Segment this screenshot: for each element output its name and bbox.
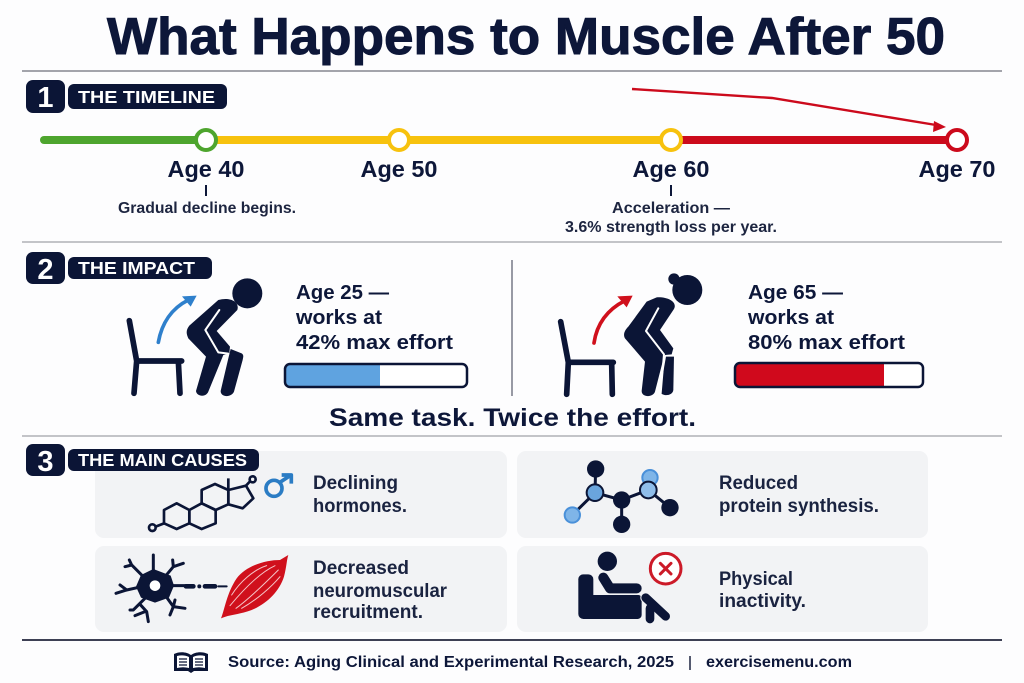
heading: the impact: THE IMPACT xyxy=(78,258,195,278)
text: age 25 effort xyxy=(295,281,453,354)
heading: the impact: 2 xyxy=(37,254,54,286)
note: gradual decline: Gradual decline begins. xyxy=(118,200,296,217)
text: reduced protein synthesis: Reduced xyxy=(719,473,798,494)
icon: protein molecule xyxy=(565,460,679,533)
icon: young man rising from chair xyxy=(129,278,262,396)
text: physical inactivity xyxy=(719,569,806,612)
card: reduced protein synthesis xyxy=(517,451,928,538)
text: age 65 effort: Age 65 — xyxy=(748,281,844,304)
text: age 25 effort: works at xyxy=(295,306,382,329)
text: source citation: Source: Aging Clinical and Experimental Research, 2025 xyxy=(228,654,674,671)
text: decreased neuromuscular recruitment xyxy=(313,558,448,623)
icon: seated person with cross xyxy=(578,552,681,619)
text: declining hormones xyxy=(313,473,407,517)
text: age 25 effort: Age 25 — xyxy=(296,281,389,304)
icon: open book xyxy=(174,652,208,673)
label: age 60: Age 60 xyxy=(632,156,710,182)
panel: section 2 the impact xyxy=(26,252,923,432)
card: declining hormones xyxy=(95,451,507,538)
text: website: exercisemenu.com xyxy=(706,654,852,671)
callout: same task twice the effort: Same task. Twice the effort. xyxy=(329,404,696,432)
text: declining hormones: Declining xyxy=(313,473,398,494)
title: What Happens to Muscle After 50 xyxy=(107,8,945,66)
text: age 25 effort: 42% max effort xyxy=(296,331,453,354)
heading: the impact xyxy=(26,252,212,286)
card: decreased neuromuscular recruitment xyxy=(95,546,507,632)
text: decreased neuromuscular recruitment: Decreased xyxy=(313,558,409,579)
label: age 40: Age 40 xyxy=(168,156,244,182)
note: acceleration: Acceleration — xyxy=(612,200,731,217)
icon: neuron and muscle xyxy=(116,555,288,622)
icon: older woman rising from chair xyxy=(561,273,702,396)
note: acceleration: 3.6% strength loss per year. xyxy=(565,219,777,236)
text: declining hormones: hormones. xyxy=(313,496,407,517)
arrow: acceleration trend xyxy=(632,89,946,132)
heading: the timeline xyxy=(26,80,227,114)
text: decreased neuromuscular recruitment: recruitment. xyxy=(313,602,423,623)
heading: the main causes xyxy=(26,444,259,478)
panel: section 1 the timeline xyxy=(26,80,996,236)
heading: the timeline: THE TIMELINE xyxy=(78,87,215,107)
bar: 80 percent effort xyxy=(735,363,923,387)
text: physical inactivity: Physical xyxy=(719,569,793,590)
label: age 50: Age 50 xyxy=(360,156,438,182)
heading: the main causes: 3 xyxy=(37,446,54,478)
text: decreased neuromuscular recruitment: neuromuscular xyxy=(313,581,448,602)
chart: timeline track with age markers xyxy=(44,130,967,150)
text: age 65 effort: 80% max effort xyxy=(748,331,905,354)
note: acceleration xyxy=(565,200,777,236)
heading: the main causes: THE MAIN CAUSES xyxy=(78,450,247,470)
text: age 65 effort: works at xyxy=(747,306,834,329)
text: physical inactivity: inactivity. xyxy=(719,591,806,612)
footer: source line xyxy=(174,652,852,673)
heading: the timeline: 1 xyxy=(37,82,54,114)
icon: steroid molecule and male symbol xyxy=(149,475,291,531)
card: physical inactivity xyxy=(517,546,928,632)
panel: section 3 the main causes xyxy=(26,444,928,632)
label: age 70: Age 70 xyxy=(918,156,996,182)
text: reduced protein synthesis xyxy=(719,473,879,517)
bar: 42 percent effort xyxy=(285,364,467,387)
text: reduced protein synthesis: protein synthesis. xyxy=(719,496,879,517)
text: age 65 effort xyxy=(747,281,905,354)
